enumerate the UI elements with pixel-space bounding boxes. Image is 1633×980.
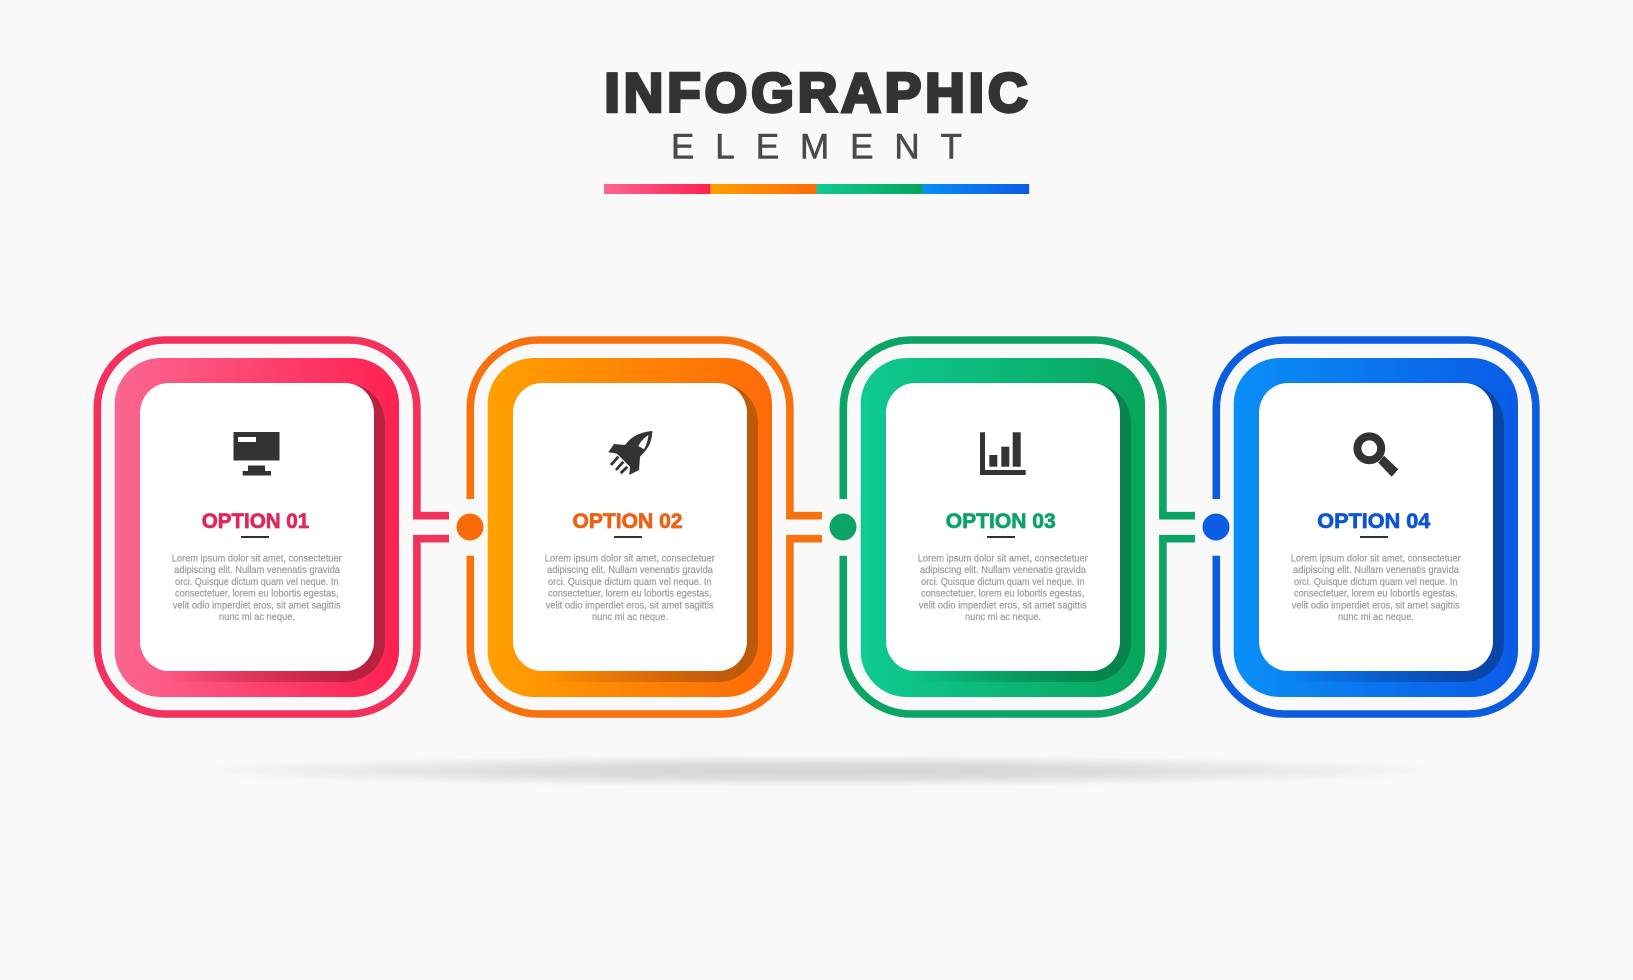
body text: nunc mi ac neque. xyxy=(965,612,1041,623)
white card xyxy=(140,383,374,671)
heading underline xyxy=(987,536,1015,538)
heading: option 02: OPTION 02 xyxy=(572,509,683,533)
heading underline xyxy=(614,536,642,538)
heading underline xyxy=(241,536,269,538)
gradient frame xyxy=(861,358,1145,697)
gradient frame xyxy=(1234,358,1518,697)
body text: consectetuer, lorem eu lobortis egestas, xyxy=(175,589,338,600)
body text: velit odio imperdiet eros, sit amet sagittis xyxy=(919,600,1087,611)
title colour bar xyxy=(604,184,1029,194)
body text xyxy=(918,554,1088,623)
inner shade xyxy=(130,383,385,682)
white card xyxy=(886,383,1120,671)
gradient frame xyxy=(115,358,399,697)
body text: adipiscing elit. Nullam venenatis gravida xyxy=(547,565,713,576)
heading underline xyxy=(1360,536,1388,538)
body text: Lorem ipsum dolor sit amet, consectetuer xyxy=(1291,554,1461,564)
icon: rocket xyxy=(608,431,652,475)
body text: velit odio imperdiet eros, sit amet sagittis xyxy=(546,600,714,611)
icon: bar chart xyxy=(980,432,1026,475)
body text xyxy=(1291,554,1461,623)
body text xyxy=(545,554,715,623)
outer ring with connector stubs xyxy=(97,340,449,714)
body text: consectetuer, lorem eu lobortis egestas, xyxy=(921,589,1084,600)
panel: option 03 xyxy=(843,340,1195,714)
outer ring with connector stubs xyxy=(843,340,1195,714)
inner shade xyxy=(503,383,758,682)
gradient frame xyxy=(488,358,772,697)
outer ring with connector stubs xyxy=(470,340,822,714)
body text: adipiscing elit. Nullam venenatis gravida xyxy=(174,565,340,576)
connector dot: blue xyxy=(1202,514,1230,540)
heading: option 04: OPTION 04 xyxy=(1317,509,1430,533)
outer ring xyxy=(1216,340,1536,714)
body text: orci. Quisque dictum quam vel neque. In xyxy=(1294,577,1458,588)
body text: velit odio imperdiet eros, sit amet sagittis xyxy=(1292,600,1460,611)
ground shadow xyxy=(180,755,1460,787)
body text: Lorem ipsum dolor sit amet, consectetuer xyxy=(545,554,715,564)
body text: nunc mi ac neque. xyxy=(592,612,668,623)
body text: consectetuer, lorem eu lobortis egestas, xyxy=(1294,589,1458,600)
heading: option 01: OPTION 01 xyxy=(202,509,309,533)
icon: magnifier xyxy=(1357,436,1398,477)
inner shade xyxy=(876,383,1131,682)
panel: option 02 xyxy=(470,340,822,714)
body text: orci. Quisque dictum quam vel neque. In xyxy=(921,577,1084,588)
heading: option 03: OPTION 03 xyxy=(946,509,1056,533)
connector dot: orange xyxy=(456,514,484,540)
body text: consectetuer, lorem eu lobortis egestas, xyxy=(548,589,712,600)
panel: option 04 xyxy=(1216,340,1536,714)
body text: velit odio imperdiet eros, sit amet sagittis xyxy=(173,600,341,611)
title: INFOGRAPHIC: INFOGRAPHIC xyxy=(604,62,1032,124)
white card xyxy=(513,383,747,671)
body text xyxy=(172,554,342,623)
body text: orci. Quisque dictum quam vel neque. In xyxy=(548,577,712,588)
icon: monitor xyxy=(234,432,280,476)
white card xyxy=(1259,383,1493,671)
body text: adipiscing elit. Nullam venenatis gravida xyxy=(920,565,1086,576)
connector dot: green xyxy=(830,514,856,540)
body text: Lorem ipsum dolor sit amet, consectetuer xyxy=(172,554,342,564)
body text: Lorem ipsum dolor sit amet, consectetuer xyxy=(918,554,1088,564)
panel: option 01 xyxy=(97,340,449,714)
inner shade xyxy=(1249,383,1504,682)
body text: orci. Quisque dictum quam vel neque. In xyxy=(175,577,338,588)
body text: nunc mi ac neque. xyxy=(219,612,295,623)
body text: nunc mi ac neque. xyxy=(1338,612,1414,623)
subtitle: ELEMENT: ELEMENT xyxy=(671,128,962,166)
body text: adipiscing elit. Nullam venenatis gravida xyxy=(1293,565,1459,576)
